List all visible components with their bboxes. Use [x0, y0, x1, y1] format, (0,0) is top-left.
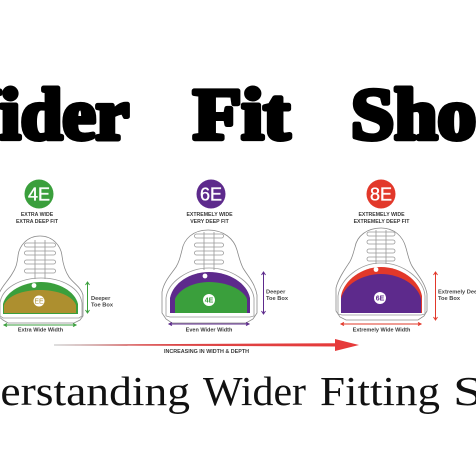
shoe diagram: 6E	[162, 230, 257, 323]
shoe diagram: 6E: 4E	[205, 298, 214, 304]
label: deeper toe box: Toe Box	[266, 296, 289, 302]
label: extremely wide width: Extremely Wide Width	[353, 328, 411, 334]
arrow: width	[4, 324, 76, 326]
shoe diagram: 8E	[336, 228, 427, 320]
subtitle	[0, 368, 476, 414]
badge: 8E: 8E	[370, 184, 392, 204]
arrow: width	[169, 322, 249, 326]
label: extremely wide extremely deep fit: EXTREMELY DEEP FIT	[354, 219, 410, 225]
arrow: toe box depth	[86, 282, 90, 313]
label: extremely wide very deep fit: EXTREMELY WIDE	[186, 212, 233, 218]
badge: 4E: 4E	[28, 184, 50, 204]
panel: 8E fit	[336, 180, 476, 334]
label: extremely wide very deep fit: VERY DEEP FIT	[190, 219, 230, 225]
badge: 6E: 6E	[200, 184, 222, 204]
label: increasing in width and depth: INCREASING IN WIDTH & DEPTH	[164, 349, 249, 355]
title: Fit	[193, 74, 290, 155]
arrow: toe box depth	[262, 272, 266, 314]
badge: 6E	[196, 180, 226, 208]
shoe diagram: 4E	[0, 236, 83, 323]
badge: 8E	[366, 180, 396, 208]
arrow: toe box depth	[434, 272, 438, 320]
title	[0, 74, 476, 155]
shoe diagram: 4E: EE	[34, 298, 44, 306]
panel: 6E fit	[162, 180, 289, 334]
subtitle: Fitting	[320, 368, 440, 414]
label: extra wide extra deep fit: EXTRA WIDE	[21, 212, 54, 218]
arrow: increasing width and depth	[54, 339, 359, 351]
label: extra wide extra deep fit: EXTRA DEEP FIT	[16, 219, 59, 225]
subtitle: Wider	[203, 368, 306, 414]
arrow: width	[341, 322, 421, 326]
label: extra wide width: Extra Wide Width	[18, 328, 64, 334]
shoe diagram: 8E: 6E	[376, 296, 385, 302]
label: deeper toe box: Deeper	[91, 296, 111, 302]
label: extremely deep toe box: Toe Box	[438, 296, 461, 302]
label: even wider width: Even Wider Width	[186, 328, 233, 334]
panel: 4E fit	[0, 180, 114, 334]
badge: 4E	[24, 180, 54, 208]
label: extremely wide extremely deep fit: EXTREMELY WIDE	[358, 212, 405, 218]
label: deeper toe box: Deeper	[266, 290, 286, 296]
label: deeper toe box: Toe Box	[91, 302, 114, 308]
